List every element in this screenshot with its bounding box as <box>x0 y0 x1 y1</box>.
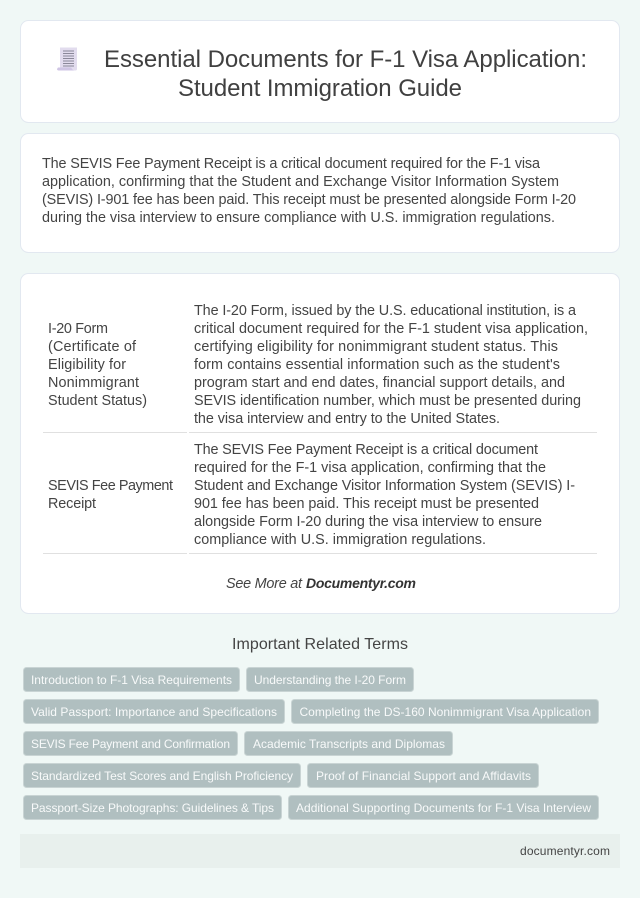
see more link: See More at <box>226 576 303 592</box>
tag <box>24 668 240 692</box>
tag: Additional Supporting Documents for F-1 Visa Interview <box>296 801 591 815</box>
panel: summary <box>20 134 620 252</box>
tag: Standardized Test Scores and English Proficiency <box>31 769 293 783</box>
footer <box>20 834 620 868</box>
tag <box>288 796 598 820</box>
tag: Passport-Size Photographs: Guidelines & Tips <box>31 801 274 815</box>
tag: SEVIS Fee Payment and Confirmation <box>31 737 230 751</box>
row description: I-20 Form: program start and end dates, financial support details, and <box>194 375 565 391</box>
see more link <box>226 575 416 592</box>
row description: SEVIS Fee Payment Receipt: 901 fee has been paid. This receipt must be presented <box>194 496 539 512</box>
panel: documents table <box>20 274 620 614</box>
see more link: Documentyr.com <box>306 575 416 591</box>
tag <box>24 764 300 788</box>
row label: I-20 Form: Nonimmigrant <box>48 375 139 391</box>
row label: SEVIS Fee Payment Receipt: Receipt <box>48 496 96 512</box>
title <box>104 46 587 102</box>
tag <box>24 700 284 724</box>
tag: Introduction to F-1 Visa Requirements <box>31 673 232 687</box>
row description: SEVIS Fee Payment Receipt: alongside Form I-20 during the visa interview to ensure <box>194 514 542 530</box>
row label: I-20 Form <box>48 321 147 409</box>
tag <box>292 700 598 724</box>
tag: Valid Passport: Importance and Specifications <box>31 705 277 719</box>
row description: I-20 Form: SEVIS identification number, which must be presented during <box>194 393 581 409</box>
tag: Proof of Financial Support and Affidavits <box>316 769 531 783</box>
table row: I-20 Form <box>48 303 588 427</box>
title: Student Immigration Guide <box>178 75 462 102</box>
tag <box>244 732 452 756</box>
footer: documentyr.com <box>520 844 610 858</box>
tag <box>308 764 538 788</box>
row label: I-20 Form: Student Status) <box>48 393 147 409</box>
tag <box>24 732 238 756</box>
row description: SEVIS Fee Payment Receipt: compliance with U.S. immigration regulations. <box>194 532 486 548</box>
row label: I-20 Form: Eligibility for <box>48 357 126 373</box>
row description: I-20 Form: certifying eligibility for nonimmigrant student status. This <box>194 339 558 355</box>
row description: SEVIS Fee Payment Receipt <box>194 442 575 548</box>
row label: I-20 Form: (Certificate of <box>48 339 137 355</box>
text block: summary paragraph <box>42 156 576 226</box>
row description: I-20 Form: form contains essential information such as the student's <box>194 357 560 373</box>
row description: I-20 Form: the visa interview and entry to the United States. <box>194 411 500 427</box>
panel: header <box>20 20 620 122</box>
heading: related terms: Important Related Terms <box>232 636 408 653</box>
related term tags <box>24 668 598 820</box>
row description: SEVIS Fee Payment Receipt: The SEVIS Fee Payment Receipt is a critical document <box>194 442 538 458</box>
tag: Academic Transcripts and Diplomas <box>253 737 445 751</box>
text block: summary paragraph: application, confirming that the Student and Exchange Visitor Information System <box>42 174 559 190</box>
table row: SEVIS Fee Payment Receipt <box>48 442 575 548</box>
row description: I-20 Form <box>194 303 588 427</box>
title: Essential Documents for F-1 Visa Application: <box>104 46 587 73</box>
text block: summary paragraph: The SEVIS Fee Payment Receipt is a critical document required for the F-1 visa <box>42 156 540 172</box>
tag: Completing the DS-160 Nonimmigrant Visa Application <box>300 705 591 719</box>
row label: I-20 Form: I-20 Form <box>48 321 108 337</box>
row description: I-20 Form: critical document required for the F-1 student visa application, <box>194 321 588 337</box>
row description: I-20 Form: The I-20 Form, issued by the U.S. educational institution, is a <box>194 303 576 319</box>
row description: SEVIS Fee Payment Receipt: Student and Exchange Visitor Information System (SEVIS) I- <box>194 478 575 494</box>
tag: Understanding the I-20 Form <box>254 673 406 687</box>
tag <box>24 796 282 820</box>
icon: document scroll <box>57 48 77 70</box>
row label: SEVIS Fee Payment Receipt <box>48 478 173 512</box>
row label: SEVIS Fee Payment Receipt: SEVIS Fee Payment <box>48 478 173 494</box>
text block: summary paragraph: (SEVIS) I-901 fee has been paid. This receipt must be presented alongside Form I-20 <box>42 192 576 208</box>
row description: SEVIS Fee Payment Receipt: required for the F-1 visa application, confirming that the <box>194 460 546 476</box>
tag <box>246 668 414 692</box>
text block: summary paragraph: during the visa interview to ensure compliance with U.S. immigration regulations. <box>42 210 555 226</box>
